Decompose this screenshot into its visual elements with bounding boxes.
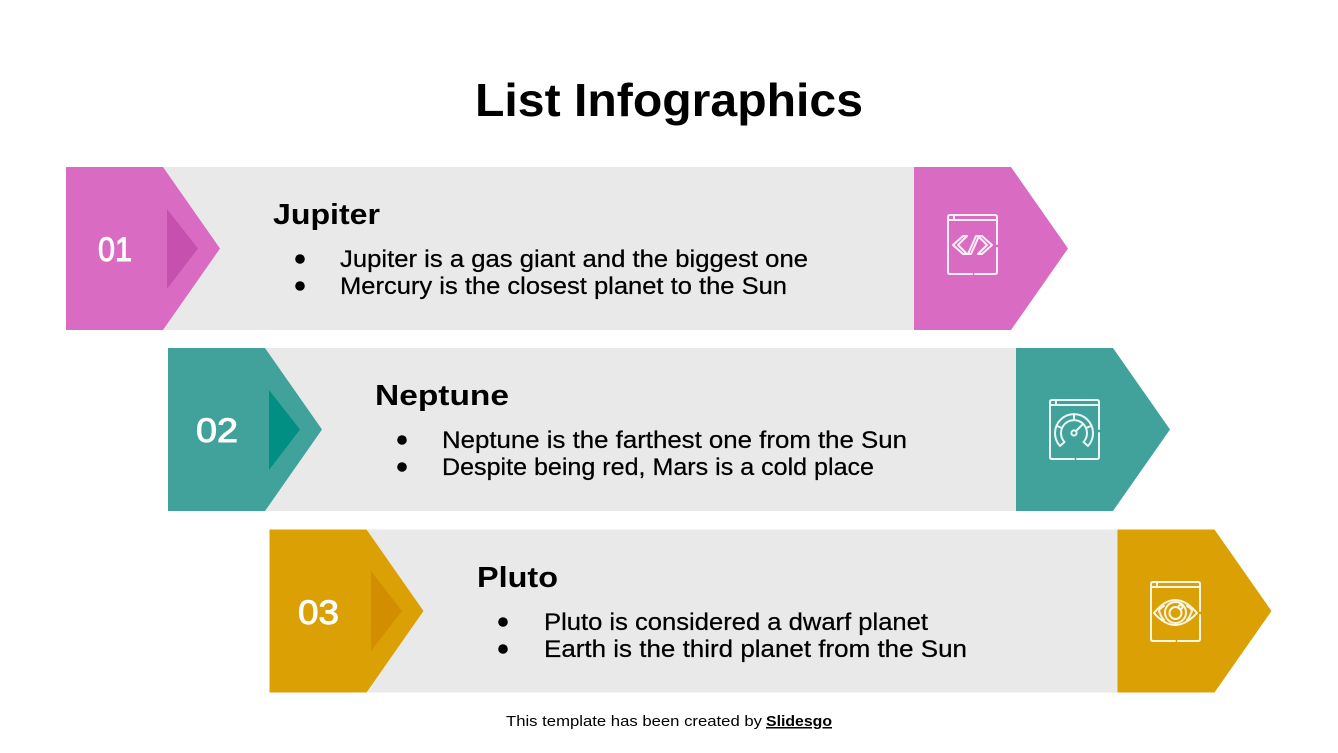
bullet list: Earth is the third planet from the Sun (544, 636, 967, 663)
number: 03 (298, 594, 339, 632)
icon: code window (948, 215, 997, 274)
inner triangle (269, 390, 300, 470)
footer credit: Slidesgo (766, 713, 832, 730)
number: 02 (196, 412, 238, 450)
grey band (262, 348, 1022, 511)
panel: Jupiter row (66, 167, 1068, 330)
bullet list (397, 427, 907, 481)
icon: gauge window (1050, 400, 1099, 459)
panel: Pluto row (270, 530, 1272, 692)
left arrow tag (66, 167, 220, 330)
heading: Jupiter (273, 199, 380, 231)
bullet list: Jupiter is a gas giant and the biggest one (340, 246, 808, 273)
left arrow tag (270, 530, 424, 692)
left arrow tag (168, 348, 322, 511)
inner triangle (167, 209, 198, 289)
grey band (160, 167, 920, 330)
inner triangle (371, 571, 402, 651)
icon: eye window (1151, 582, 1200, 641)
bullet list: Mercury is the closest planet to the Sun (340, 273, 787, 300)
footer credit: This template has been created by (506, 713, 763, 730)
heading: Pluto (477, 562, 558, 594)
panel: Neptune row (168, 348, 1170, 511)
right arrow tag (1016, 348, 1170, 511)
title: List Infographics (475, 74, 863, 126)
number: 01 (98, 231, 132, 269)
right arrow tag (914, 167, 1068, 330)
grey band (364, 530, 1124, 692)
bullet list: Despite being red, Mars is a cold place (442, 454, 874, 481)
right arrow tag (1118, 530, 1272, 692)
heading: Neptune (375, 380, 509, 412)
bullet list (295, 246, 808, 300)
bullet list: Neptune is the farthest one from the Sun (442, 427, 907, 454)
bullet list (498, 609, 967, 663)
bullet list: Pluto is considered a dwarf planet (544, 609, 928, 636)
